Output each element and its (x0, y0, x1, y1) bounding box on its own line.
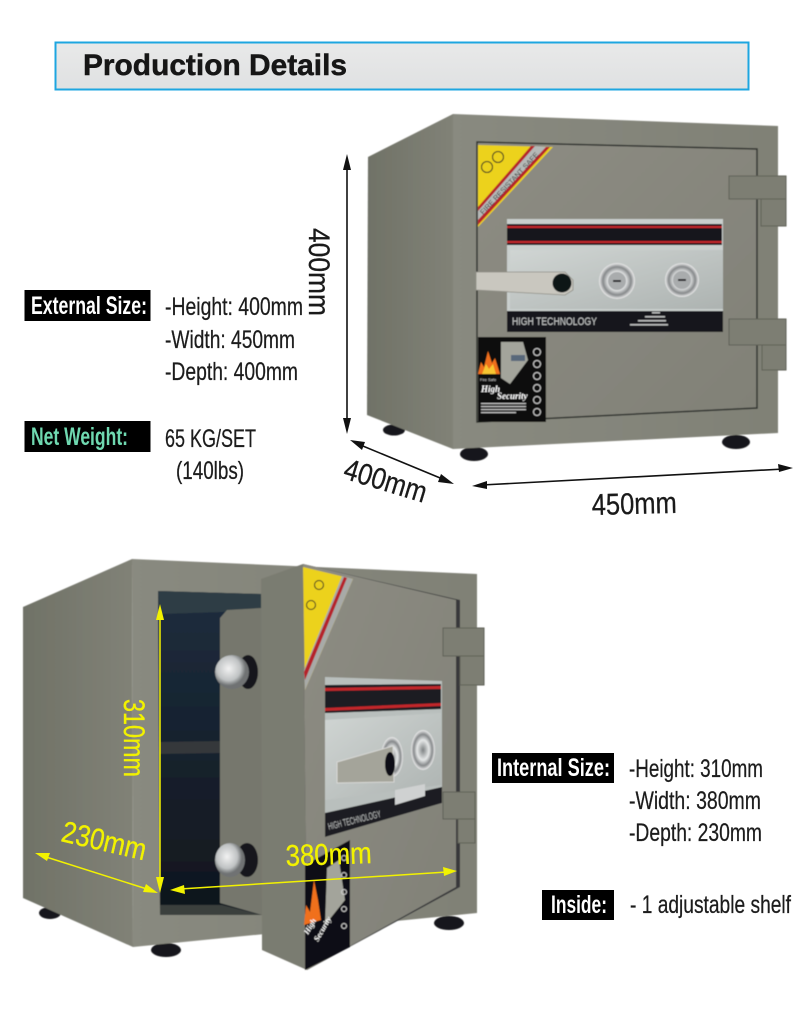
handle (476, 272, 573, 295)
dimension arrow: internal depth (35, 853, 158, 893)
safe feet (383, 424, 750, 461)
open door lock right (411, 730, 435, 770)
open door high technology band (325, 784, 442, 837)
label: 310mm height: 310mm (117, 699, 150, 777)
locking bolt top (215, 655, 258, 689)
internal size tag (492, 753, 614, 783)
label: 400mm height: 400mm (302, 228, 335, 316)
external size specs: -Width: 450mm (165, 326, 295, 354)
open safe feet (39, 907, 464, 957)
internal size specs (629, 755, 763, 847)
fire safe warning label: FIRE RESISTANT SAFE (479, 151, 541, 216)
safe front face (453, 114, 778, 449)
high technology band (507, 311, 723, 332)
label: 230mm depth: 230mm (58, 816, 150, 867)
control panel (476, 219, 723, 332)
fire safe warning label (478, 145, 553, 227)
net weight tag: Net Weight: (31, 423, 128, 451)
hinges (729, 176, 786, 370)
open door certification sticker (301, 840, 350, 970)
open door certification sticker: Security (312, 915, 334, 943)
door frame shadow (303, 564, 460, 970)
external size tag (24, 290, 150, 321)
high technology band: HIGH TECHNOLOGY (512, 316, 598, 328)
open door lock left (381, 737, 403, 777)
door back plate (220, 608, 262, 915)
label: 450mm width: 450mm (591, 487, 677, 522)
label: 400mm depth: 400mm (340, 453, 431, 510)
open safe hinges (443, 628, 484, 843)
open door certification sticker: High (301, 916, 318, 937)
external size specs: -Height: 400mm (165, 293, 303, 321)
external size tag: External Size: (31, 292, 147, 320)
illustration: closed safe (367, 114, 786, 461)
certification sticker (478, 337, 546, 422)
inside tag: Inside: (551, 891, 607, 919)
key lock right (665, 263, 699, 297)
external size specs (165, 293, 303, 386)
certification sticker: High (480, 384, 500, 394)
safe side face (367, 114, 453, 449)
door (477, 142, 757, 422)
dimension arrow: external height (343, 154, 351, 434)
door edge (261, 564, 307, 970)
black and red stripe (507, 224, 722, 245)
open door front (303, 564, 456, 970)
locking bolt bottom (215, 843, 258, 877)
certification sticker: Fire Safe (480, 377, 497, 382)
heading: production details: Production Details (83, 49, 347, 82)
internal size specs: -Depth: 230mm (629, 819, 762, 847)
net weight specs: (140lbs) (176, 457, 244, 485)
open door handle (337, 746, 395, 783)
open door warning label (303, 567, 353, 690)
net weight specs (165, 425, 256, 485)
dimension arrow: external width (472, 464, 793, 489)
open safe side face (23, 559, 133, 947)
interior opening (158, 591, 262, 915)
dimension arrow: internal height (156, 604, 164, 893)
inside tag (542, 890, 614, 920)
key lock left (599, 263, 635, 299)
certification sticker: Security (497, 391, 529, 401)
open door control panel (325, 677, 442, 837)
dimension arrow: external depth (350, 440, 454, 484)
net weight specs: 65 KG/SET (165, 425, 256, 453)
internal size specs: -Width: 380mm (629, 787, 761, 815)
open door stripe (325, 684, 441, 713)
dimension arrow: internal width (170, 867, 457, 894)
open safe front face (132, 559, 477, 947)
header bar (56, 42, 748, 90)
external size specs: -Depth: 400mm (165, 358, 298, 386)
open door high technology band: HIGH TECHNOLOGY (327, 809, 382, 833)
shelf (160, 741, 220, 754)
illustration: open safe (23, 559, 484, 970)
internal size tag: Internal Size: (497, 754, 610, 782)
label: 380mm width: 380mm (285, 837, 372, 873)
